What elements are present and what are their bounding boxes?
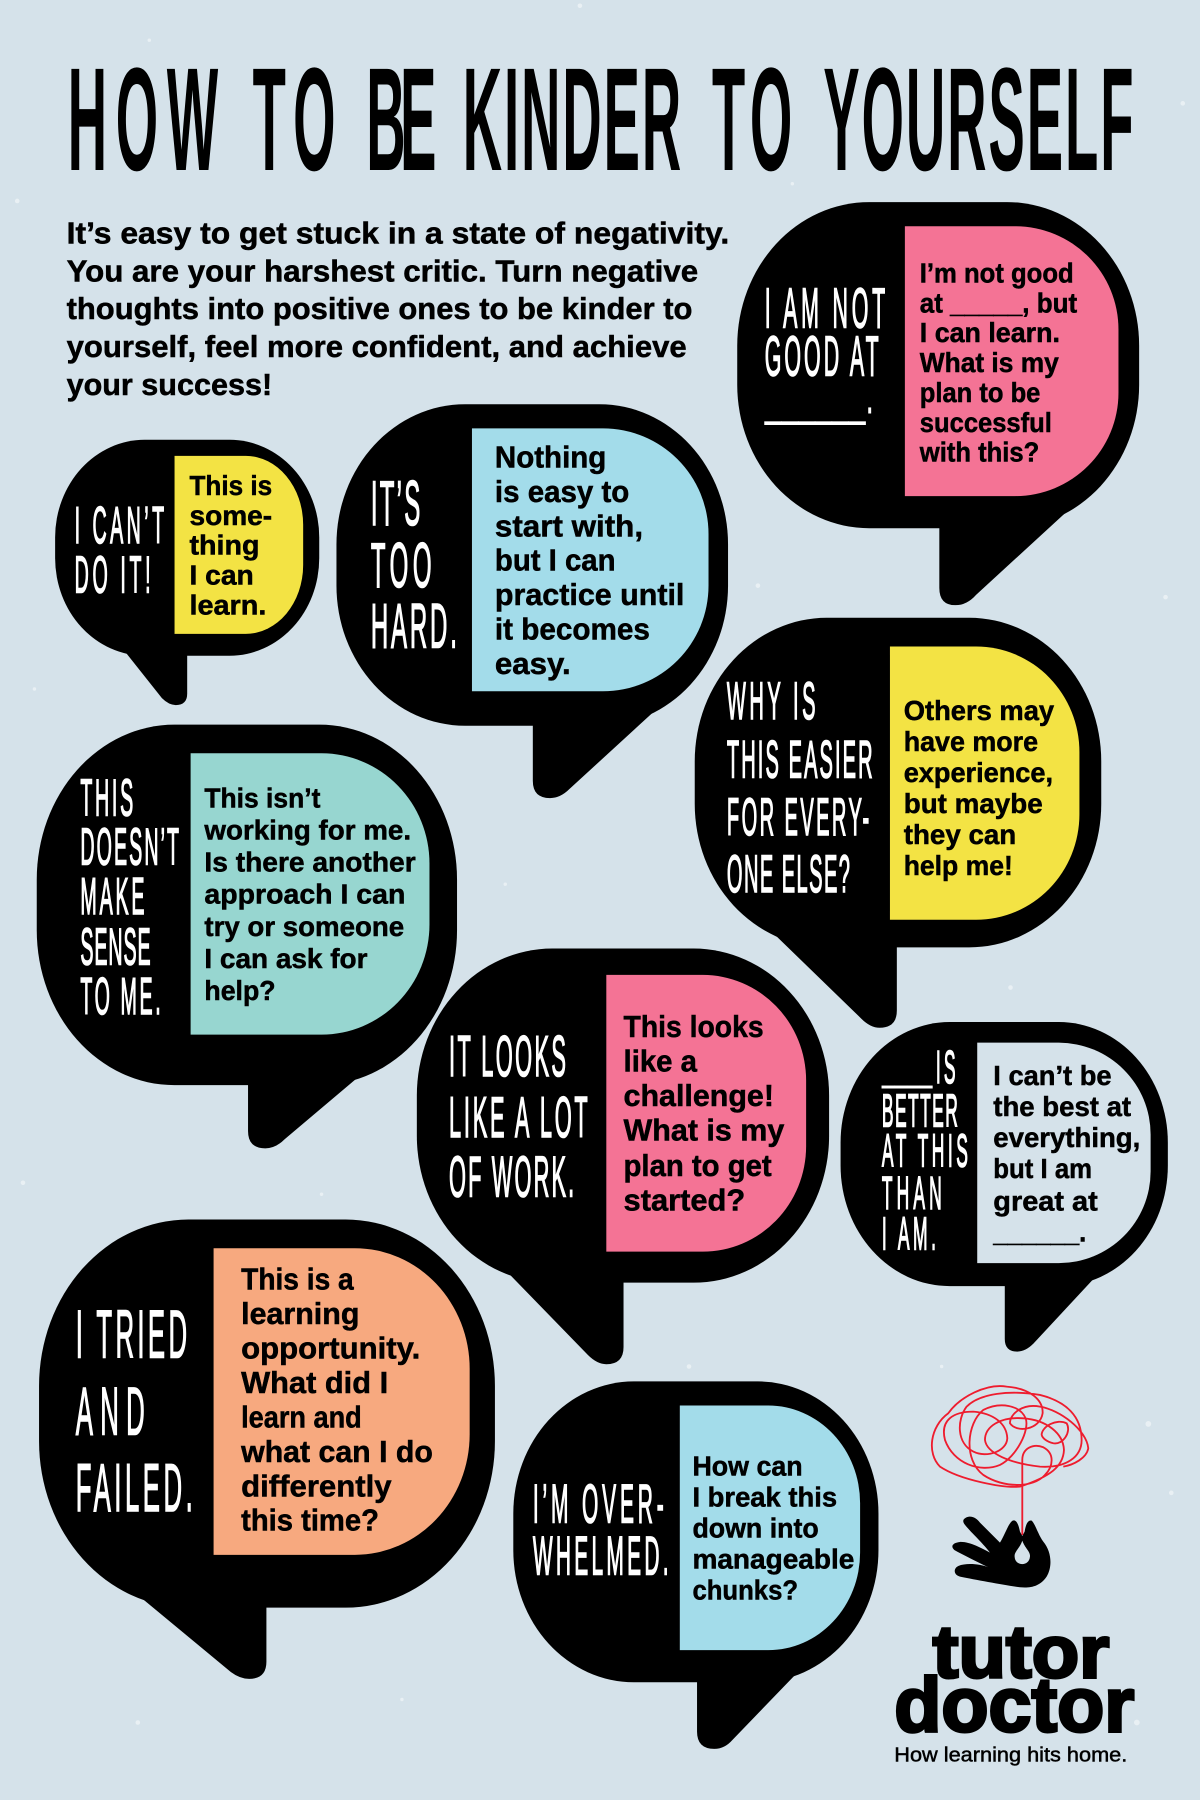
positive reframe text — [624, 1010, 784, 1217]
positive reframe text: I can — [189, 559, 254, 590]
title: HOW — [68, 39, 218, 202]
positive reframe text: What is my — [920, 347, 1059, 378]
panel: light reframe — [977, 1043, 1151, 1263]
speech bubble: I can't do it — [55, 440, 319, 705]
negative thought text: IT’S — [371, 469, 420, 539]
negative thought text — [80, 770, 179, 1026]
negative thought text — [533, 1472, 669, 1586]
positive reframe text: easy. — [495, 647, 571, 681]
positive reframe text: at _____, but — [920, 287, 1077, 318]
positive reframe text: but I am — [993, 1153, 1092, 1184]
positive reframe text — [240, 1263, 433, 1538]
speech bubble: ___ is better at this than I am — [841, 1022, 1168, 1352]
positive reframe text: this time? — [241, 1504, 379, 1538]
positive reframe text: with this? — [919, 437, 1039, 468]
speech bubble: Why is this easier — [695, 618, 1101, 1028]
positive reframe text: ______. — [992, 1216, 1086, 1247]
negative thought text: BETTER — [882, 1087, 958, 1137]
panel: pink reframe — [606, 975, 806, 1252]
negative thought text — [76, 1297, 193, 1526]
positive reframe text: differently — [241, 1469, 392, 1503]
wordmark: tutor — [933, 1610, 1109, 1693]
positive reframe text: they can — [904, 819, 1016, 850]
positive reframe text: This looks — [624, 1010, 764, 1044]
negative thought text: I AM NOT — [765, 277, 885, 340]
negative thought text: GOOD AT — [765, 325, 879, 389]
panel: orange reframe — [214, 1248, 470, 1555]
title: BE — [366, 39, 436, 202]
negative thought text — [727, 673, 873, 904]
intro text block — [67, 215, 729, 402]
positive reframe text: working for me. — [203, 814, 411, 845]
positive reframe text: opportunity. — [241, 1331, 420, 1365]
negative thought text: AT THIS — [882, 1127, 968, 1177]
negative thought text: THIS EASIER — [727, 731, 873, 789]
title: KINDER — [463, 39, 681, 202]
negative thought text: ____ — [881, 1037, 933, 1089]
negative thought text: DO IT! — [75, 548, 151, 604]
positive reframe text — [919, 257, 1077, 468]
negative thought text: THAN — [882, 1170, 942, 1220]
negative thought text: LIKE A LOT — [449, 1087, 588, 1150]
positive reframe text — [189, 470, 272, 620]
negative thought text: I’M OVER- — [533, 1472, 664, 1535]
panel: yellow reframe — [175, 456, 303, 634]
positive reframe text: How can — [692, 1451, 803, 1482]
negative thought text: I CAN’T — [75, 498, 164, 555]
negative thought text: SENSE — [80, 920, 151, 976]
positive reframe text: I can ask for — [204, 943, 368, 974]
logo: tutor doctor — [894, 1386, 1134, 1767]
panel: teal reframe — [191, 753, 429, 1035]
intro text block: your success! — [67, 367, 272, 402]
intro text block: yourself, feel more confident, and achieve — [67, 329, 687, 364]
positive reframe text: What did I — [241, 1366, 388, 1400]
positive reframe text: started? — [624, 1183, 745, 1217]
negative thought text: FOR EVERY- — [727, 789, 869, 847]
speech bubble: This doesn't make sense — [37, 725, 457, 1148]
positive reframe text: This isn’t — [204, 782, 321, 813]
positive reframe text: Is there another — [204, 847, 416, 878]
panel: blue reframe — [680, 1406, 860, 1650]
negative thought text: DOESN’T — [80, 820, 179, 877]
negative thought text: I AM. — [882, 1210, 936, 1260]
positive reframe text: but maybe — [904, 788, 1043, 819]
positive reframe text: help? — [204, 975, 276, 1006]
positive reframe text: challenge! — [624, 1079, 774, 1113]
negative thought text: TOO — [371, 531, 432, 601]
positive reframe text: successful — [920, 407, 1052, 438]
positive reframe text — [904, 695, 1055, 881]
positive reframe text: help me! — [904, 850, 1013, 881]
intro text block: You are your harshest critic. Turn negative — [67, 253, 698, 288]
speech bubble: It's too hard — [336, 404, 728, 798]
negative thought text: ONE ELSE? — [727, 846, 850, 904]
intro text block: It’s easy to get stuck in a state of negativity. — [67, 215, 729, 250]
negative thought text — [75, 498, 164, 604]
negative thought text: THIS — [80, 770, 133, 827]
positive reframe text: the best at — [993, 1091, 1132, 1122]
positive reframe text: everything, — [993, 1122, 1140, 1153]
positive reframe text: some- — [189, 500, 272, 531]
positive reframe text: great at — [993, 1185, 1098, 1216]
positive reframe text — [495, 440, 684, 681]
positive reframe text: plan to get — [624, 1149, 772, 1183]
positive reframe text: approach I can — [204, 879, 405, 910]
negative thought text: AND — [76, 1373, 145, 1449]
positive reframe text: is easy to — [495, 475, 629, 509]
positive reframe text: plan to be — [920, 377, 1040, 408]
positive reframe text: learn and — [241, 1400, 362, 1434]
negative thought text: ______. — [764, 362, 874, 425]
speech bubble: I'm overwhelmed — [513, 1381, 878, 1749]
positive reframe text — [992, 1060, 1140, 1247]
positive reframe text: learning — [241, 1297, 359, 1331]
positive reframe text: what can I do — [240, 1435, 433, 1469]
negative thought text: OF WORK. — [449, 1146, 574, 1210]
positive reframe text: practice until — [495, 578, 684, 612]
negative thought text: HARD. — [371, 592, 457, 662]
negative thought text — [449, 1026, 588, 1210]
positive reframe text: I’m not good — [920, 257, 1074, 288]
negative thought text — [371, 469, 457, 662]
negative thought text: WHY IS — [727, 673, 815, 731]
panel: yellow reframe — [890, 647, 1079, 920]
positive reframe text: Others may — [904, 695, 1055, 726]
positive reframe text: like a — [624, 1044, 698, 1078]
tagline: How learning hits home. — [894, 1744, 1127, 1767]
negative thought text — [764, 277, 885, 425]
positive reframe text: I can’t be — [993, 1060, 1112, 1091]
positive reframe text: have more — [904, 726, 1038, 757]
title: TO — [712, 39, 792, 202]
panel: blue reframe — [472, 428, 709, 691]
positive reframe text: manageable — [692, 1544, 854, 1575]
wordmark: doctor — [894, 1663, 1134, 1749]
negative thought text — [881, 1037, 968, 1260]
positive reframe text: but I can — [495, 544, 616, 578]
positive reframe text: What is my — [624, 1113, 784, 1147]
title: YOURSELF — [823, 39, 1134, 202]
icon: red scribble brain — [932, 1386, 1088, 1535]
speech bubble: I am not good at — [737, 202, 1139, 605]
positive reframe text: thing — [189, 530, 260, 561]
positive reframe text: I can learn. — [920, 317, 1060, 348]
negative thought text: WHELMED. — [533, 1524, 669, 1586]
positive reframe text: experience, — [904, 757, 1053, 788]
positive reframe text: This is a — [241, 1263, 355, 1297]
negative thought text: IS — [936, 1043, 956, 1093]
positive reframe text: it becomes — [495, 613, 650, 647]
speech bubble: It looks like a lot of work — [417, 949, 829, 1364]
negative thought text: IT LOOKS — [449, 1026, 566, 1089]
title: TO — [253, 39, 335, 202]
negative thought text: I TRIED — [76, 1297, 187, 1372]
positive reframe text: learn. — [189, 589, 266, 620]
panel: pink reframe — [905, 226, 1118, 496]
speech bubble: I tried and failed — [39, 1220, 495, 1679]
positive reframe text — [692, 1451, 854, 1606]
positive reframe text: chunks? — [692, 1575, 798, 1606]
positive reframe text: down into — [692, 1513, 819, 1544]
positive reframe text: This is — [189, 470, 272, 501]
title — [68, 39, 1134, 202]
positive reframe text: start with, — [495, 509, 643, 543]
intro text block: thoughts into positive ones to be kinder to — [67, 291, 692, 326]
icon: hand holding drop — [952, 1517, 1050, 1588]
positive reframe text — [203, 782, 416, 1006]
negative thought text: FAILED. — [76, 1450, 193, 1526]
positive reframe text: try or someone — [204, 911, 404, 942]
negative thought text: TO ME. — [80, 969, 161, 1026]
positive reframe text: I break this — [692, 1482, 837, 1513]
negative thought text: MAKE — [80, 869, 145, 926]
positive reframe text: Nothing — [495, 440, 606, 474]
wordmark — [894, 1610, 1134, 1749]
